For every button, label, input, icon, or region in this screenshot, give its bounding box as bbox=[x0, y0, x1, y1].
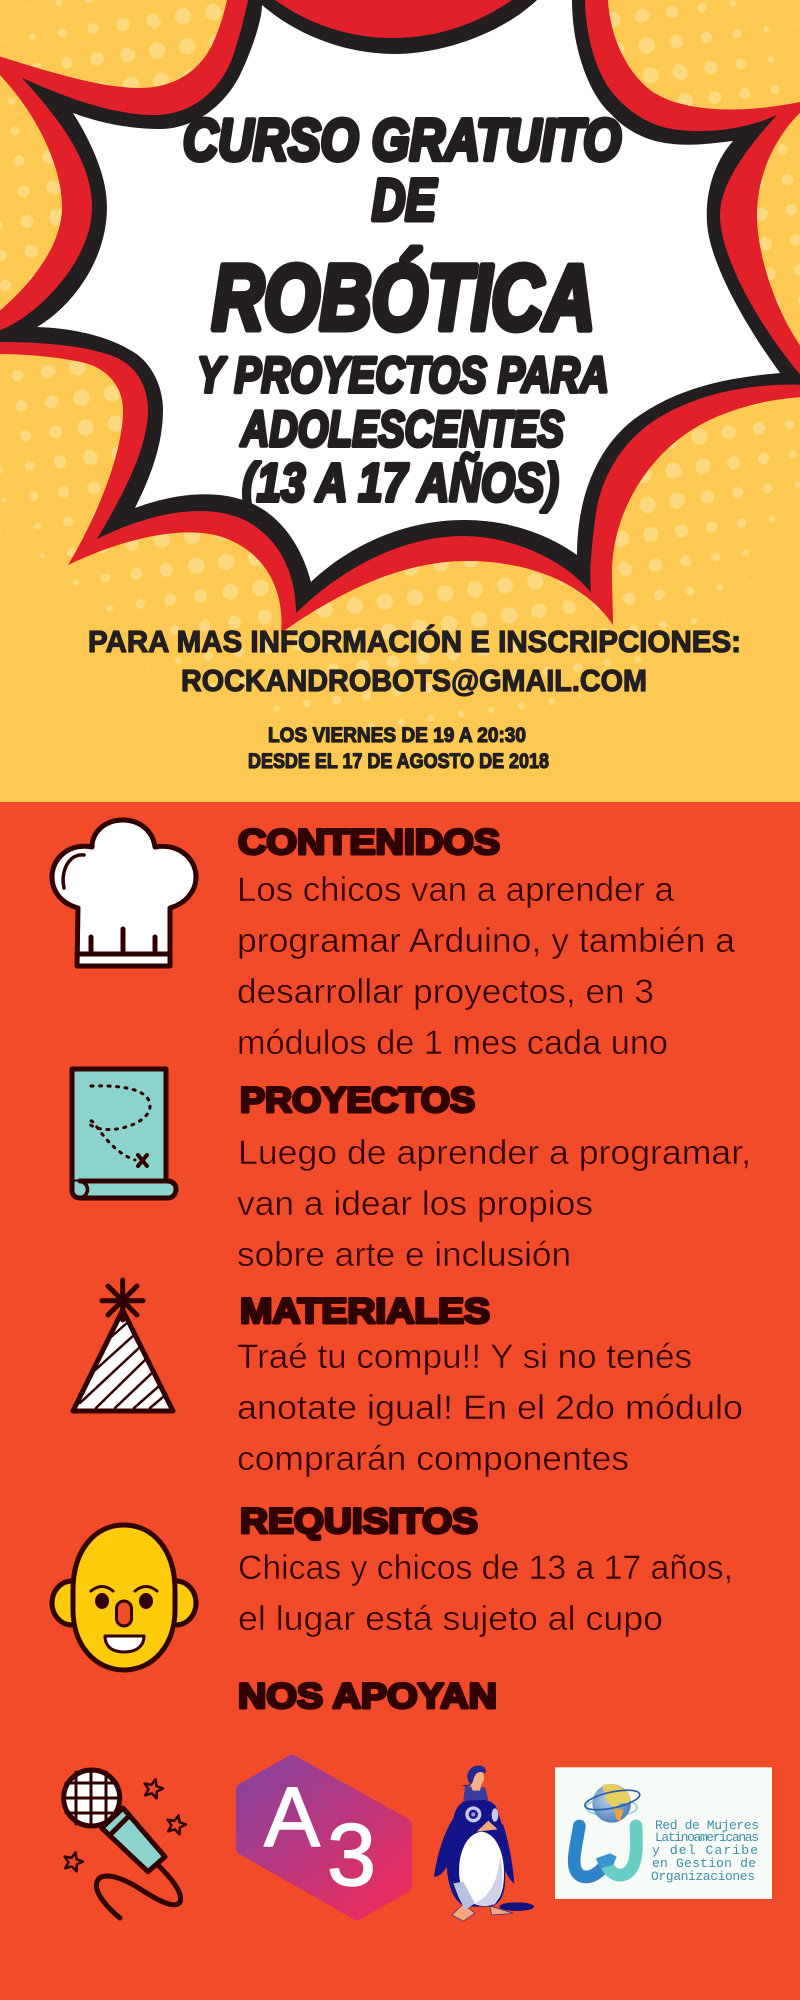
logo: A3: A bbox=[264, 1770, 320, 1864]
section: requisitos bbox=[238, 1502, 733, 1638]
section: proyectos: Luego de aprender a programar, bbox=[238, 1134, 751, 1172]
contact information bbox=[88, 623, 741, 698]
contact information: ROCKANDROBOTS@GMAIL.COM bbox=[181, 663, 647, 698]
organization name: en Gestion de bbox=[652, 1856, 756, 1871]
section: requisitos: el lugar está sujeto al cupo bbox=[238, 1600, 663, 1638]
section: requisitos: Chicas y chicos de 13 a 17 años, bbox=[238, 1549, 733, 1587]
halftone dot pattern bbox=[0, 0, 800, 732]
section: contenidos: Los chicos van a aprender a bbox=[237, 871, 674, 909]
organization name: Red de Mujeres bbox=[655, 1818, 759, 1833]
section: proyectos: van a idear los propios bbox=[237, 1185, 593, 1223]
section: materiales bbox=[237, 1292, 743, 1478]
title: ADOLESCENTES bbox=[239, 401, 564, 457]
panel: orange content background bbox=[0, 802, 800, 2000]
title: DE bbox=[372, 168, 438, 233]
organization name: Organizaciones bbox=[651, 1869, 755, 1884]
icon: smiling face bbox=[52, 1525, 196, 1670]
section: proyectos: PROYECTOS bbox=[240, 1081, 475, 1120]
title: Y PROYECTOS PARA bbox=[197, 347, 609, 403]
organization name: y del Caribe bbox=[652, 1843, 758, 1858]
heading: nos apoyan: NOS APOYAN bbox=[238, 1677, 497, 1716]
logo: A3: 3 bbox=[327, 1805, 376, 1904]
section: proyectos bbox=[237, 1081, 751, 1274]
section: contenidos: CONTENIDOS bbox=[238, 823, 500, 862]
icon: party hat bbox=[73, 1280, 173, 1411]
section: contenidos: programar Arduino, y también a bbox=[237, 922, 735, 960]
schedule: LOS VIERNES DE 19 A 20:30 bbox=[268, 724, 526, 747]
section: contenidos: módulos de 1 mes cada uno bbox=[237, 1024, 668, 1062]
logo: A3 bbox=[243, 1762, 405, 1913]
section: requisitos: REQUISITOS bbox=[240, 1502, 478, 1541]
section: materiales: Traé tu compu!! Y si no tenés bbox=[237, 1338, 692, 1376]
title: CURSO GRATUITO bbox=[183, 108, 621, 173]
section: materiales: comprarán componentes bbox=[237, 1440, 629, 1478]
panel: yellow header background bbox=[0, 0, 800, 802]
title bbox=[183, 108, 621, 513]
section: materiales: anotate igual! En el 2do módulo bbox=[237, 1389, 743, 1427]
organization emblem bbox=[574, 1784, 641, 1877]
logo: penguin with woman bbox=[434, 1766, 534, 1921]
logo card: Red de Mujeres bbox=[555, 1767, 772, 1899]
contact information: PARA MAS INFORMACIÓN E INSCRIPCIONES: bbox=[88, 623, 741, 659]
section: materiales: MATERIALES bbox=[240, 1292, 490, 1331]
schedule bbox=[248, 724, 549, 773]
comic burst shape bbox=[0, 0, 800, 633]
title: (13 A 17 AÑOS) bbox=[242, 453, 559, 513]
icon: microphone bbox=[62, 1770, 188, 1918]
section: proyectos: sobre arte e inclusión bbox=[237, 1236, 571, 1274]
icon: chef hat bbox=[52, 820, 196, 966]
schedule: DESDE EL 17 DE AGOSTO DE 2018 bbox=[248, 750, 549, 773]
organization name: Latinoamericanas bbox=[655, 1830, 759, 1845]
icon: treasure map scroll bbox=[72, 1069, 176, 1198]
section: contenidos bbox=[237, 823, 735, 1062]
section: contenidos: desarrollar proyectos, en 3 bbox=[237, 973, 654, 1011]
title: ROBÓTICA bbox=[212, 247, 595, 349]
organization name bbox=[651, 1818, 759, 1884]
